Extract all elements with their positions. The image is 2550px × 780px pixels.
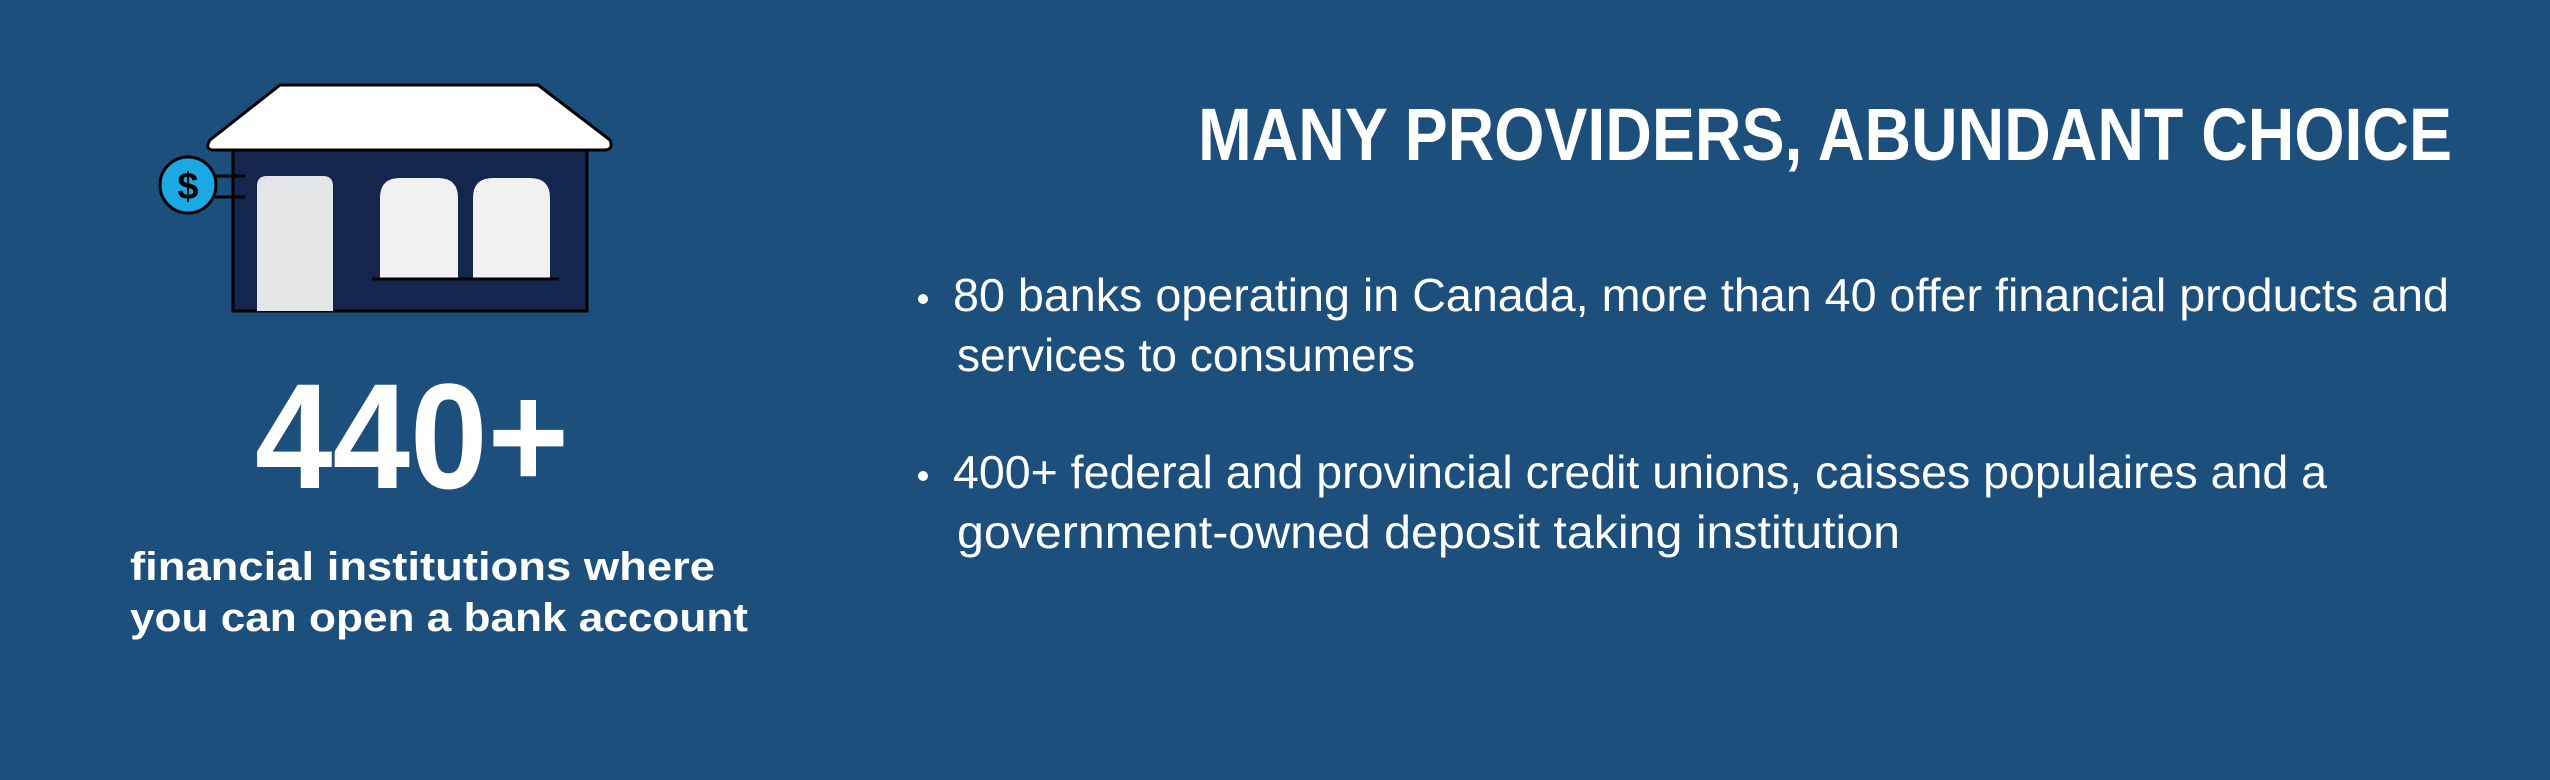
bullet: banks: 80 banks operating in Canada, more than 40 offer financial products and xyxy=(953,269,2449,321)
bullet: credit unions xyxy=(918,446,2327,558)
icon: bank building xyxy=(160,85,611,311)
bullet: credit unions: government-owned deposit taking institution xyxy=(957,506,1900,558)
caption: financial institutions: you can open a bank account xyxy=(130,596,748,640)
big number: 440+: 440+ xyxy=(255,352,569,520)
caption: financial institutions: financial institutions where xyxy=(130,545,715,589)
coin sign xyxy=(215,174,245,178)
bullet: banks: services to consumers xyxy=(957,329,1415,381)
caption: financial institutions xyxy=(130,545,748,640)
bullet: banks xyxy=(918,269,2449,381)
door xyxy=(257,176,333,311)
bullet: credit unions: 400+ federal and provincial credit unions, caisses populaires and a xyxy=(953,446,2327,498)
windows xyxy=(380,178,458,278)
icon: bank building: $ xyxy=(177,166,199,208)
roof xyxy=(208,85,611,150)
